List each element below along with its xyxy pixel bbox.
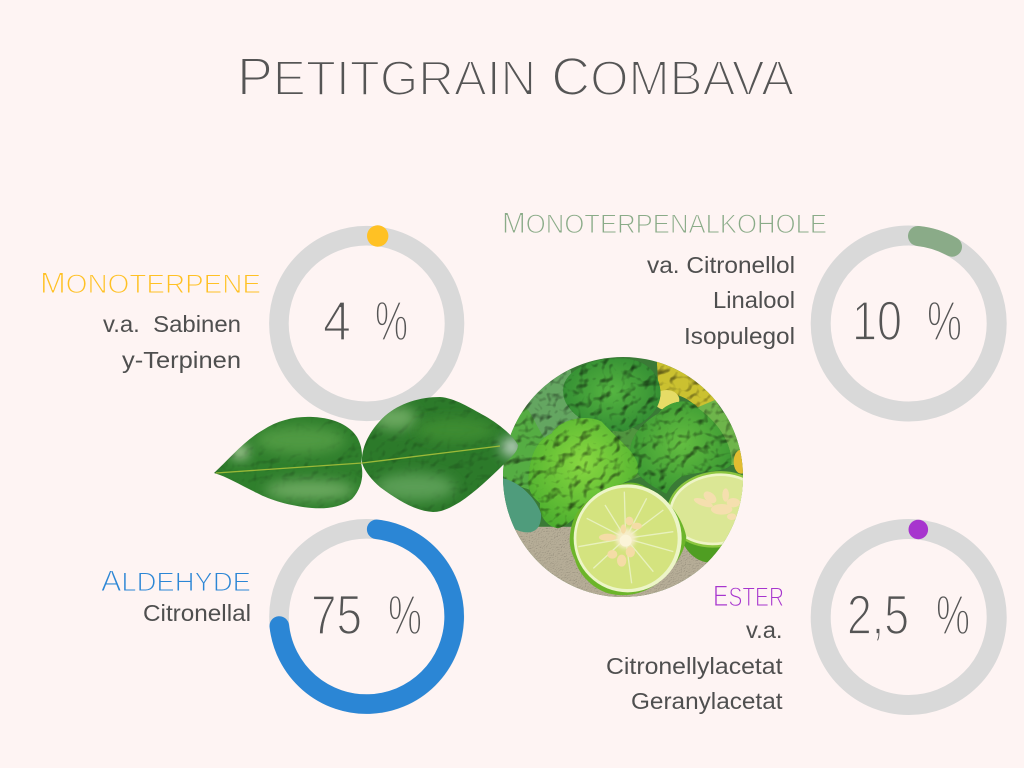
panel: Ester (606, 520, 997, 714)
heading: Monoterpenalkohole: MONOTERPENALKOHOLE (502, 207, 827, 240)
text: Ester components (606, 617, 783, 714)
donut chart: 2,5 %: 2,5 (847, 583, 909, 646)
donut chart: 10 % (821, 236, 997, 412)
panel: Aldehyde (101, 529, 454, 704)
donut chart: 75 % (279, 529, 454, 704)
text: Monoterpenalkohole components: va. Citronellol (647, 252, 795, 278)
text: Ester components: Geranylacetat (631, 688, 783, 714)
donut chart: 4 %: % (375, 289, 408, 352)
right cut lime (668, 471, 743, 562)
text: Monoterpenalkohole components: Linalool (713, 287, 795, 313)
donut chart: 4 % (279, 225, 455, 411)
text: Monoterpene components: y-Terpinen (122, 347, 241, 373)
text: Ester components: v.a. (746, 617, 782, 643)
icon: kaffir lime leaf (210, 392, 523, 516)
donut chart: 4 %: 4 (323, 289, 351, 352)
panel: Monoterpene (40, 225, 455, 411)
panel: Monoterpenalkohole (502, 207, 997, 412)
heading: Aldehyde: ALDEHYDE (101, 565, 251, 598)
center cut lime (570, 483, 686, 595)
heading: Ester: ESTER (713, 580, 784, 613)
text: Ester components: Citronellylacetat (606, 653, 783, 679)
heading: Monoterpene: MONOTERPENE (40, 267, 261, 300)
donut chart: 2,5 %: % (936, 583, 970, 646)
photo: kaffir limes in a circle (503, 357, 743, 597)
donut chart: 75 %: % (388, 583, 422, 646)
text: Monoterpenalkohole components: Isopulegol (684, 323, 795, 349)
donut chart: 2,5 % (821, 520, 997, 705)
text: Monoterpene components (103, 311, 241, 373)
donut chart: 10 %: 10 (852, 289, 902, 352)
text: Aldehyde components: Citronellal (143, 600, 251, 626)
title: PETITGRAIN COMBAVA (237, 48, 794, 107)
text: Monoterpenalkohole components (647, 252, 795, 349)
donut chart: 75 %: 75 (311, 583, 362, 646)
donut chart: 10 %: % (927, 289, 962, 352)
text: Monoterpene components: v.a. Sabinen (103, 311, 241, 337)
